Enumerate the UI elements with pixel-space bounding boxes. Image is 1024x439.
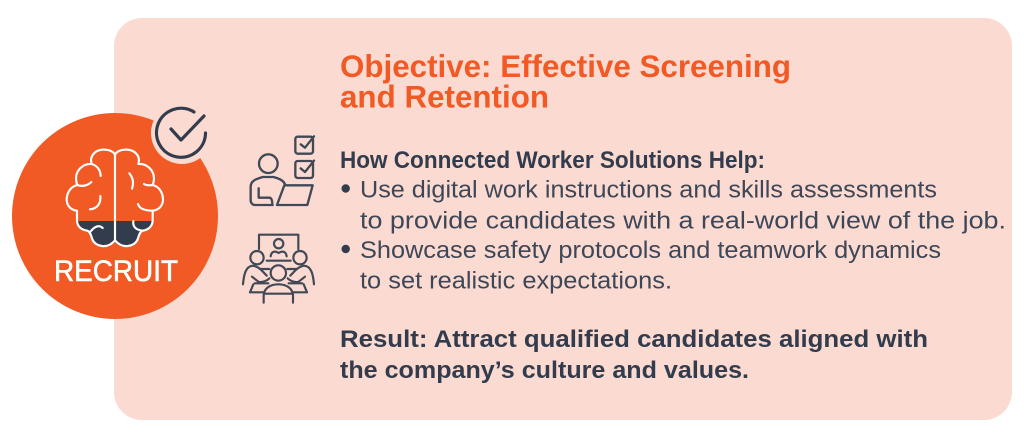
title [340,48,791,114]
badge: recruit circle [12,113,218,319]
icon: brain [67,150,163,247]
heading: how solutions help: How Connected Worker Solutions Help: [340,147,765,174]
bullet list: Showcase safety protocols and teamwork dynamics [360,237,941,264]
title: Objective: Effective Screening [340,48,791,84]
bullet list: to set realistic expectations. [360,268,672,294]
icon: check badge [151,102,213,164]
label: recruit: RECRUIT [54,255,178,288]
result statement [340,326,928,384]
bullet list: to provide candidates with a real-world view of the job. [360,208,1006,234]
result statement: the company’s culture and values. [340,357,749,384]
title: and Retention [340,78,549,114]
icon: worker at laptop with checklist [251,136,314,205]
result statement: Result: Attract qualified candidates aligned with [340,326,928,353]
icon: team video meeting [243,235,314,303]
bullet list: Use digital work instructions and skills assessments [360,176,937,204]
bullet list [342,176,1006,294]
